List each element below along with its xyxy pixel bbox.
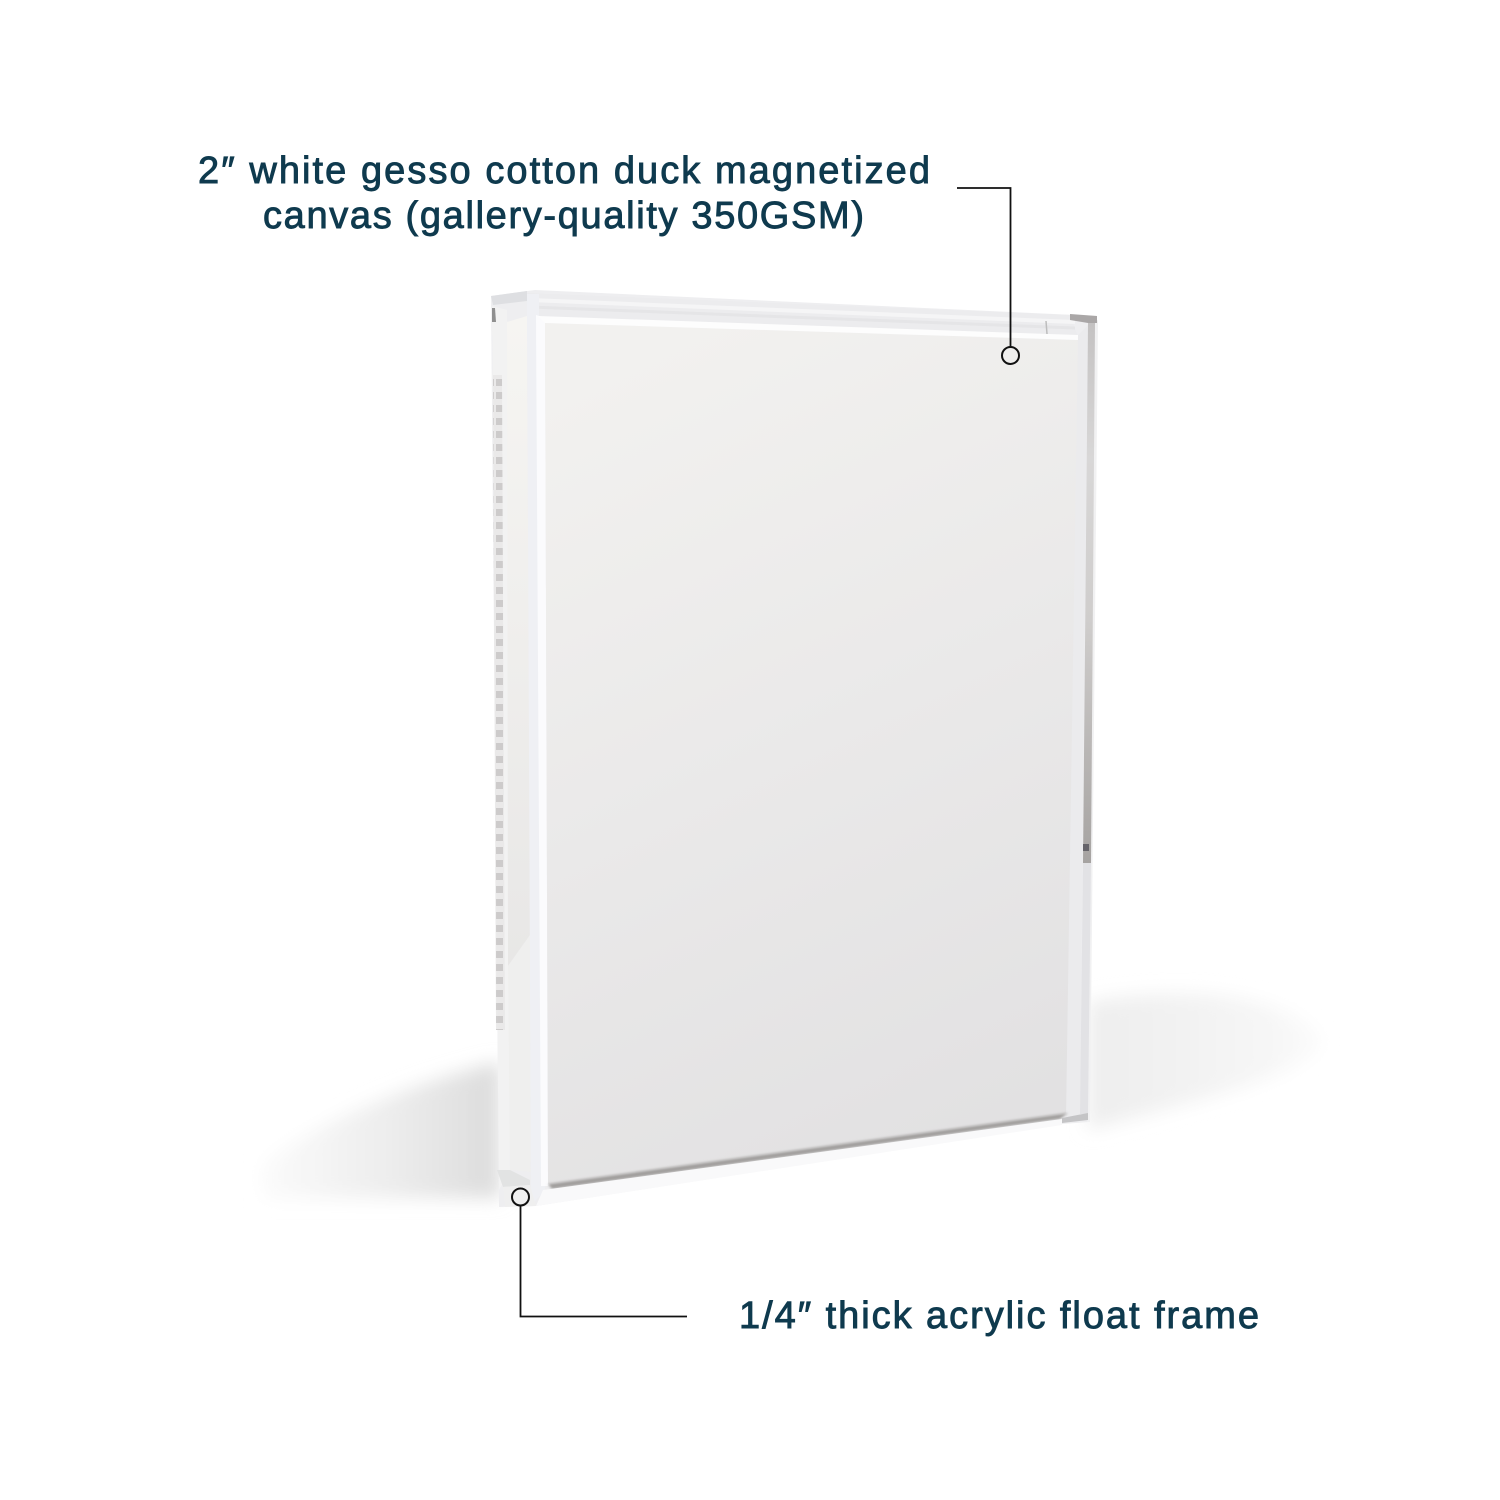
left side outer acrylic band xyxy=(492,306,510,1190)
left reflection strip xyxy=(493,375,505,1030)
canvas label text xyxy=(198,150,930,237)
left bottom corner xyxy=(497,1170,530,1187)
canvas face xyxy=(545,323,1078,1184)
vertical acrylic post xyxy=(527,294,545,1206)
canvas top white line xyxy=(538,316,1078,340)
canvas leader dot xyxy=(1002,347,1019,364)
left white canvas side xyxy=(507,316,530,966)
floor shadow xyxy=(262,994,1322,1198)
outer right edge xyxy=(1087,320,1098,1122)
canvas leader line xyxy=(957,188,1010,347)
canvas label text: 2″ white gesso cotton duck magnetized xyxy=(198,150,930,192)
frame leader dot xyxy=(512,1188,529,1206)
frame leader line xyxy=(520,1206,687,1316)
acrylic frame body xyxy=(491,290,1097,1207)
right corner dark reflection xyxy=(1070,314,1097,323)
right acrylic band xyxy=(1066,325,1088,1118)
canvas in acrylic frame xyxy=(491,290,1098,1207)
frame top edge band xyxy=(527,293,1078,337)
callout: frame xyxy=(512,1188,1259,1337)
callout: canvas xyxy=(198,150,1019,364)
right bottom corner xyxy=(1062,1113,1088,1123)
bottom acrylic band xyxy=(536,1119,1062,1206)
canvas label text: canvas (gallery-quality 350GSM) xyxy=(263,195,864,237)
frame label text: 1/4″ thick acrylic float frame xyxy=(739,1295,1259,1337)
bottom edge shadow under canvas xyxy=(548,1113,1068,1189)
